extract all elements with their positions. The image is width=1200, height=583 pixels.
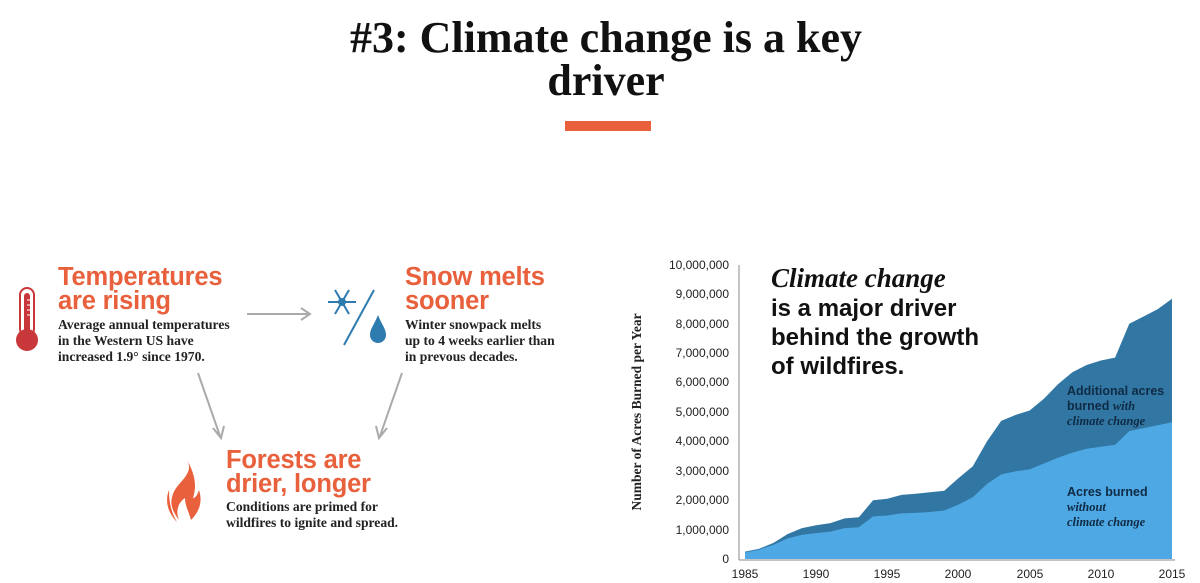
chart headline xyxy=(771,263,979,380)
x tick labels: 1995 xyxy=(874,567,901,581)
x tick labels: 2005 xyxy=(1017,567,1044,581)
heading: forests: Forests are xyxy=(226,446,361,474)
icon: flame xyxy=(167,460,201,522)
title xyxy=(350,13,862,105)
heading: temperatures xyxy=(58,263,222,315)
y tick labels: 1,000,000 xyxy=(676,523,729,537)
y tick labels: 2,000,000 xyxy=(676,493,729,507)
text: forests xyxy=(226,499,398,530)
y tick labels: 0 xyxy=(722,552,729,566)
text: temperatures: increased 1.9° since 1970. xyxy=(58,349,205,364)
chart headline: of wildfires. xyxy=(771,353,904,380)
series label: without: without xyxy=(1067,500,1106,514)
y tick labels: 9,000,000 xyxy=(676,287,729,301)
text: snow: up to 4 weeks earlier than xyxy=(405,333,555,348)
text: snow: Winter snowpack melts xyxy=(405,317,541,332)
heading: forests: drier, longer xyxy=(226,470,371,498)
x tick labels: 1990 xyxy=(803,567,830,581)
text: forests: wildfires to ignite and spread. xyxy=(226,515,398,530)
accent bar xyxy=(565,121,651,131)
series label: without xyxy=(1067,485,1148,529)
arrow: temp to snow xyxy=(247,307,312,321)
x tick labels: 2000 xyxy=(945,567,972,581)
arrow: snow to forests xyxy=(375,372,403,440)
chart headline: Climate change xyxy=(771,263,946,293)
series label: without: climate change xyxy=(1067,515,1146,529)
y axis label: Number of Acres Burned per Year xyxy=(629,313,644,511)
heading: forests xyxy=(226,446,371,498)
heading: temperatures: Temperatures xyxy=(58,263,222,291)
x tick labels: 1985 xyxy=(732,567,759,581)
icon: thermometer xyxy=(16,287,38,351)
areas xyxy=(745,299,1172,559)
arrow: temp to forests xyxy=(197,372,225,440)
heading: snow xyxy=(405,263,545,315)
x tick labels: 2015 xyxy=(1159,567,1186,581)
heading: snow: sooner xyxy=(405,287,489,315)
y tick labels xyxy=(669,258,729,566)
title: #3: Climate change is a key xyxy=(350,13,862,62)
y tick labels: 4,000,000 xyxy=(676,434,729,448)
chart headline: is a major driver xyxy=(771,295,956,322)
series label: additional: climate change xyxy=(1067,414,1146,428)
y tick labels: 8,000,000 xyxy=(676,317,729,331)
text: temperatures xyxy=(58,317,230,364)
x tick labels xyxy=(732,567,1186,581)
x tick labels: 2010 xyxy=(1088,567,1115,581)
chart headline: behind the growth xyxy=(771,324,979,351)
panel: causes diagram xyxy=(16,263,555,530)
title: driver xyxy=(547,56,665,105)
text: snow xyxy=(405,317,555,364)
y tick labels: 3,000,000 xyxy=(676,464,729,478)
series label: without: Acres burned xyxy=(1067,485,1148,499)
chart: acres burned area chart xyxy=(629,258,1186,581)
y tick labels: 7,000,000 xyxy=(676,346,729,360)
icon: snowflake and drop xyxy=(328,290,386,346)
heading: temperatures: are rising xyxy=(58,287,171,315)
series label: additional xyxy=(1067,384,1164,428)
y tick labels: 5,000,000 xyxy=(676,405,729,419)
series label: additional: Additional acres xyxy=(1067,384,1164,398)
text: forests: Conditions are primed for xyxy=(226,499,378,514)
series label: additional: burned with xyxy=(1067,399,1135,413)
text: snow: in prevous decades. xyxy=(405,349,518,364)
text: temperatures: Average annual temperatures xyxy=(58,317,230,332)
text: temperatures: in the Western US have xyxy=(58,333,194,348)
y tick labels: 6,000,000 xyxy=(676,375,729,389)
heading: snow: Snow melts xyxy=(405,263,545,291)
y tick labels: 10,000,000 xyxy=(669,258,729,272)
